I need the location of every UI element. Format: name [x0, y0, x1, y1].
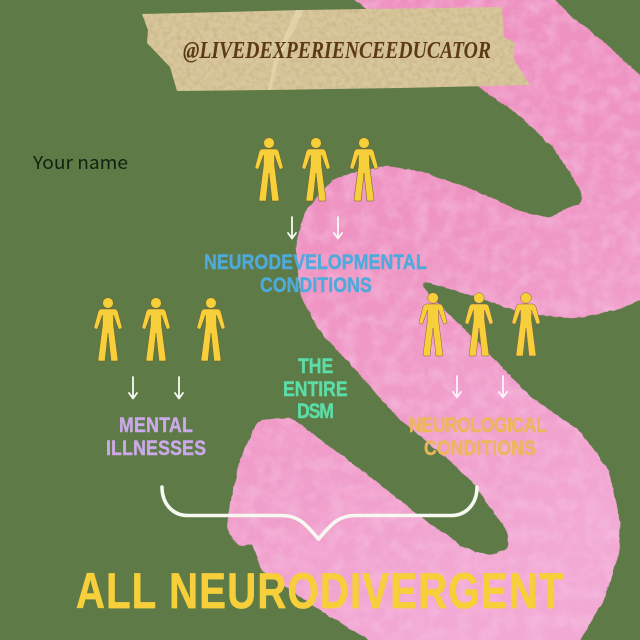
main heading: ALL NEURODIVERGENT: [76, 563, 564, 619]
label: NEUROLOGICAL: [409, 414, 547, 437]
label: CONDITIONS: [260, 274, 372, 297]
label: the entire DSM: [283, 355, 348, 423]
group: mental illnesses: [94, 298, 225, 460]
label: [106, 414, 206, 460]
label: [204, 251, 427, 297]
icons: three people: [94, 298, 225, 361]
group: neurological conditions: [409, 293, 547, 460]
arrows: [453, 376, 507, 398]
label: the entire DSM: DSM: [297, 400, 334, 423]
label: ILLNESSES: [106, 437, 206, 460]
label: CONDITIONS: [424, 437, 536, 460]
label: MENTAL: [119, 414, 193, 437]
label: the entire DSM: THE: [298, 355, 333, 378]
label: the entire DSM: ENTIRE: [283, 378, 348, 401]
masking tape banner: [142, 7, 530, 91]
group: neurodevelopmental conditions: [204, 138, 427, 297]
pink watercolour S shape: [226, 0, 640, 640]
curly brace: [162, 487, 477, 539]
arrows: [288, 217, 342, 238]
your name text: Your name: [32, 149, 128, 175]
tape handle text: @LIVEDEXPERIENCEEDUCATOR: [183, 38, 491, 64]
label: [409, 414, 547, 460]
label: NEURODEVELOPMENTAL: [204, 251, 427, 274]
icons: three people: [255, 138, 378, 201]
arrows: [129, 377, 183, 398]
icons: three people: [419, 293, 540, 356]
